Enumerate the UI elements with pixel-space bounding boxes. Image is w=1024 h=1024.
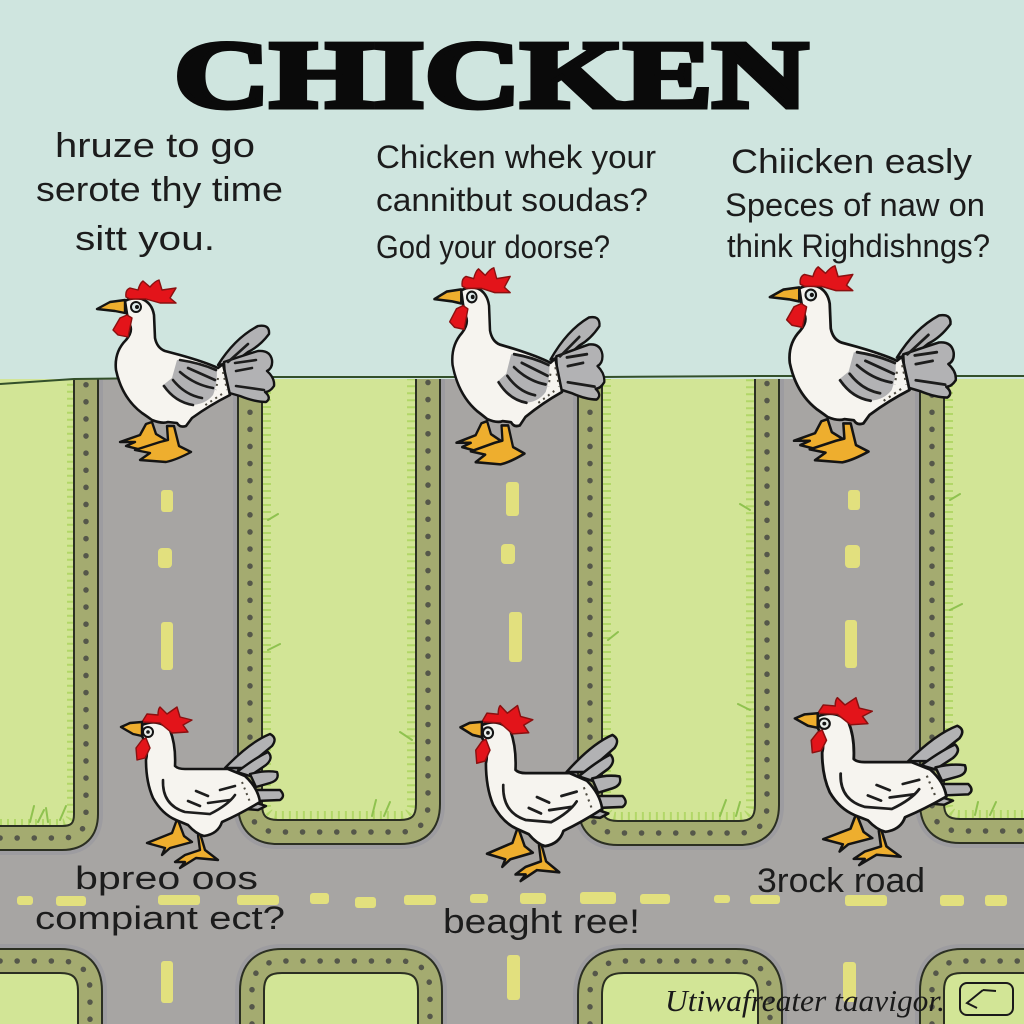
grass block: upper second (250, 378, 428, 832)
grass block: upper right (932, 378, 1024, 831)
signature: Utiwafreater taavigor. (665, 983, 945, 1018)
road markings: vertical road 2 (501, 482, 522, 1000)
grass block: lower right (932, 961, 1024, 1024)
text block: right caption: Speces of naw on (725, 187, 985, 223)
text block: middle caption: Chicken whek your (376, 139, 656, 175)
chicken: bottom middle (460, 706, 626, 881)
sky (0, 0, 1024, 379)
text block: right caption: Chiicken easly (731, 143, 972, 181)
icon: corner badge (960, 983, 1013, 1015)
title: CHICKEN (174, 21, 808, 128)
horizon line (0, 376, 1024, 384)
chicken: bottom left (121, 707, 283, 868)
text block: lower right caption: 3rock road (757, 862, 925, 900)
chicken: top right (770, 266, 956, 462)
text block: middle caption: cannitbut soudas? (376, 182, 648, 218)
text block: lower left caption: bpreo oos (75, 860, 258, 896)
text block: lower left caption: compiant ect? (35, 900, 285, 936)
chicken: bottom right (795, 698, 971, 865)
text block: left caption: serote thy time (36, 171, 283, 209)
text block: middle caption (376, 139, 656, 265)
text block: left caption: sitt you. (75, 220, 215, 258)
text block: lower left caption (35, 860, 285, 936)
text block: right caption: think Righdishngs? (727, 228, 990, 264)
road markings: vertical road 1 (158, 490, 173, 1003)
grass block: lower third (590, 961, 770, 1024)
grass block: upper left (0, 378, 86, 838)
road surface (0, 370, 1024, 1024)
chicken: top left (97, 280, 274, 462)
text block: left caption: hruze to go (55, 127, 255, 165)
grass block: upper third (590, 378, 767, 833)
text block: left caption (36, 127, 283, 258)
road markings: vertical road 3 (843, 490, 860, 1002)
grass block: lower left (0, 961, 90, 1024)
text block: lower middle caption: beaght ree! (443, 903, 640, 941)
chicken: top middle (434, 268, 604, 464)
text block: middle caption: God your doorse? (376, 229, 610, 265)
road markings: horizontal road (17, 892, 1007, 908)
text block: right caption (725, 143, 990, 264)
grass block: lower second (252, 961, 430, 1024)
